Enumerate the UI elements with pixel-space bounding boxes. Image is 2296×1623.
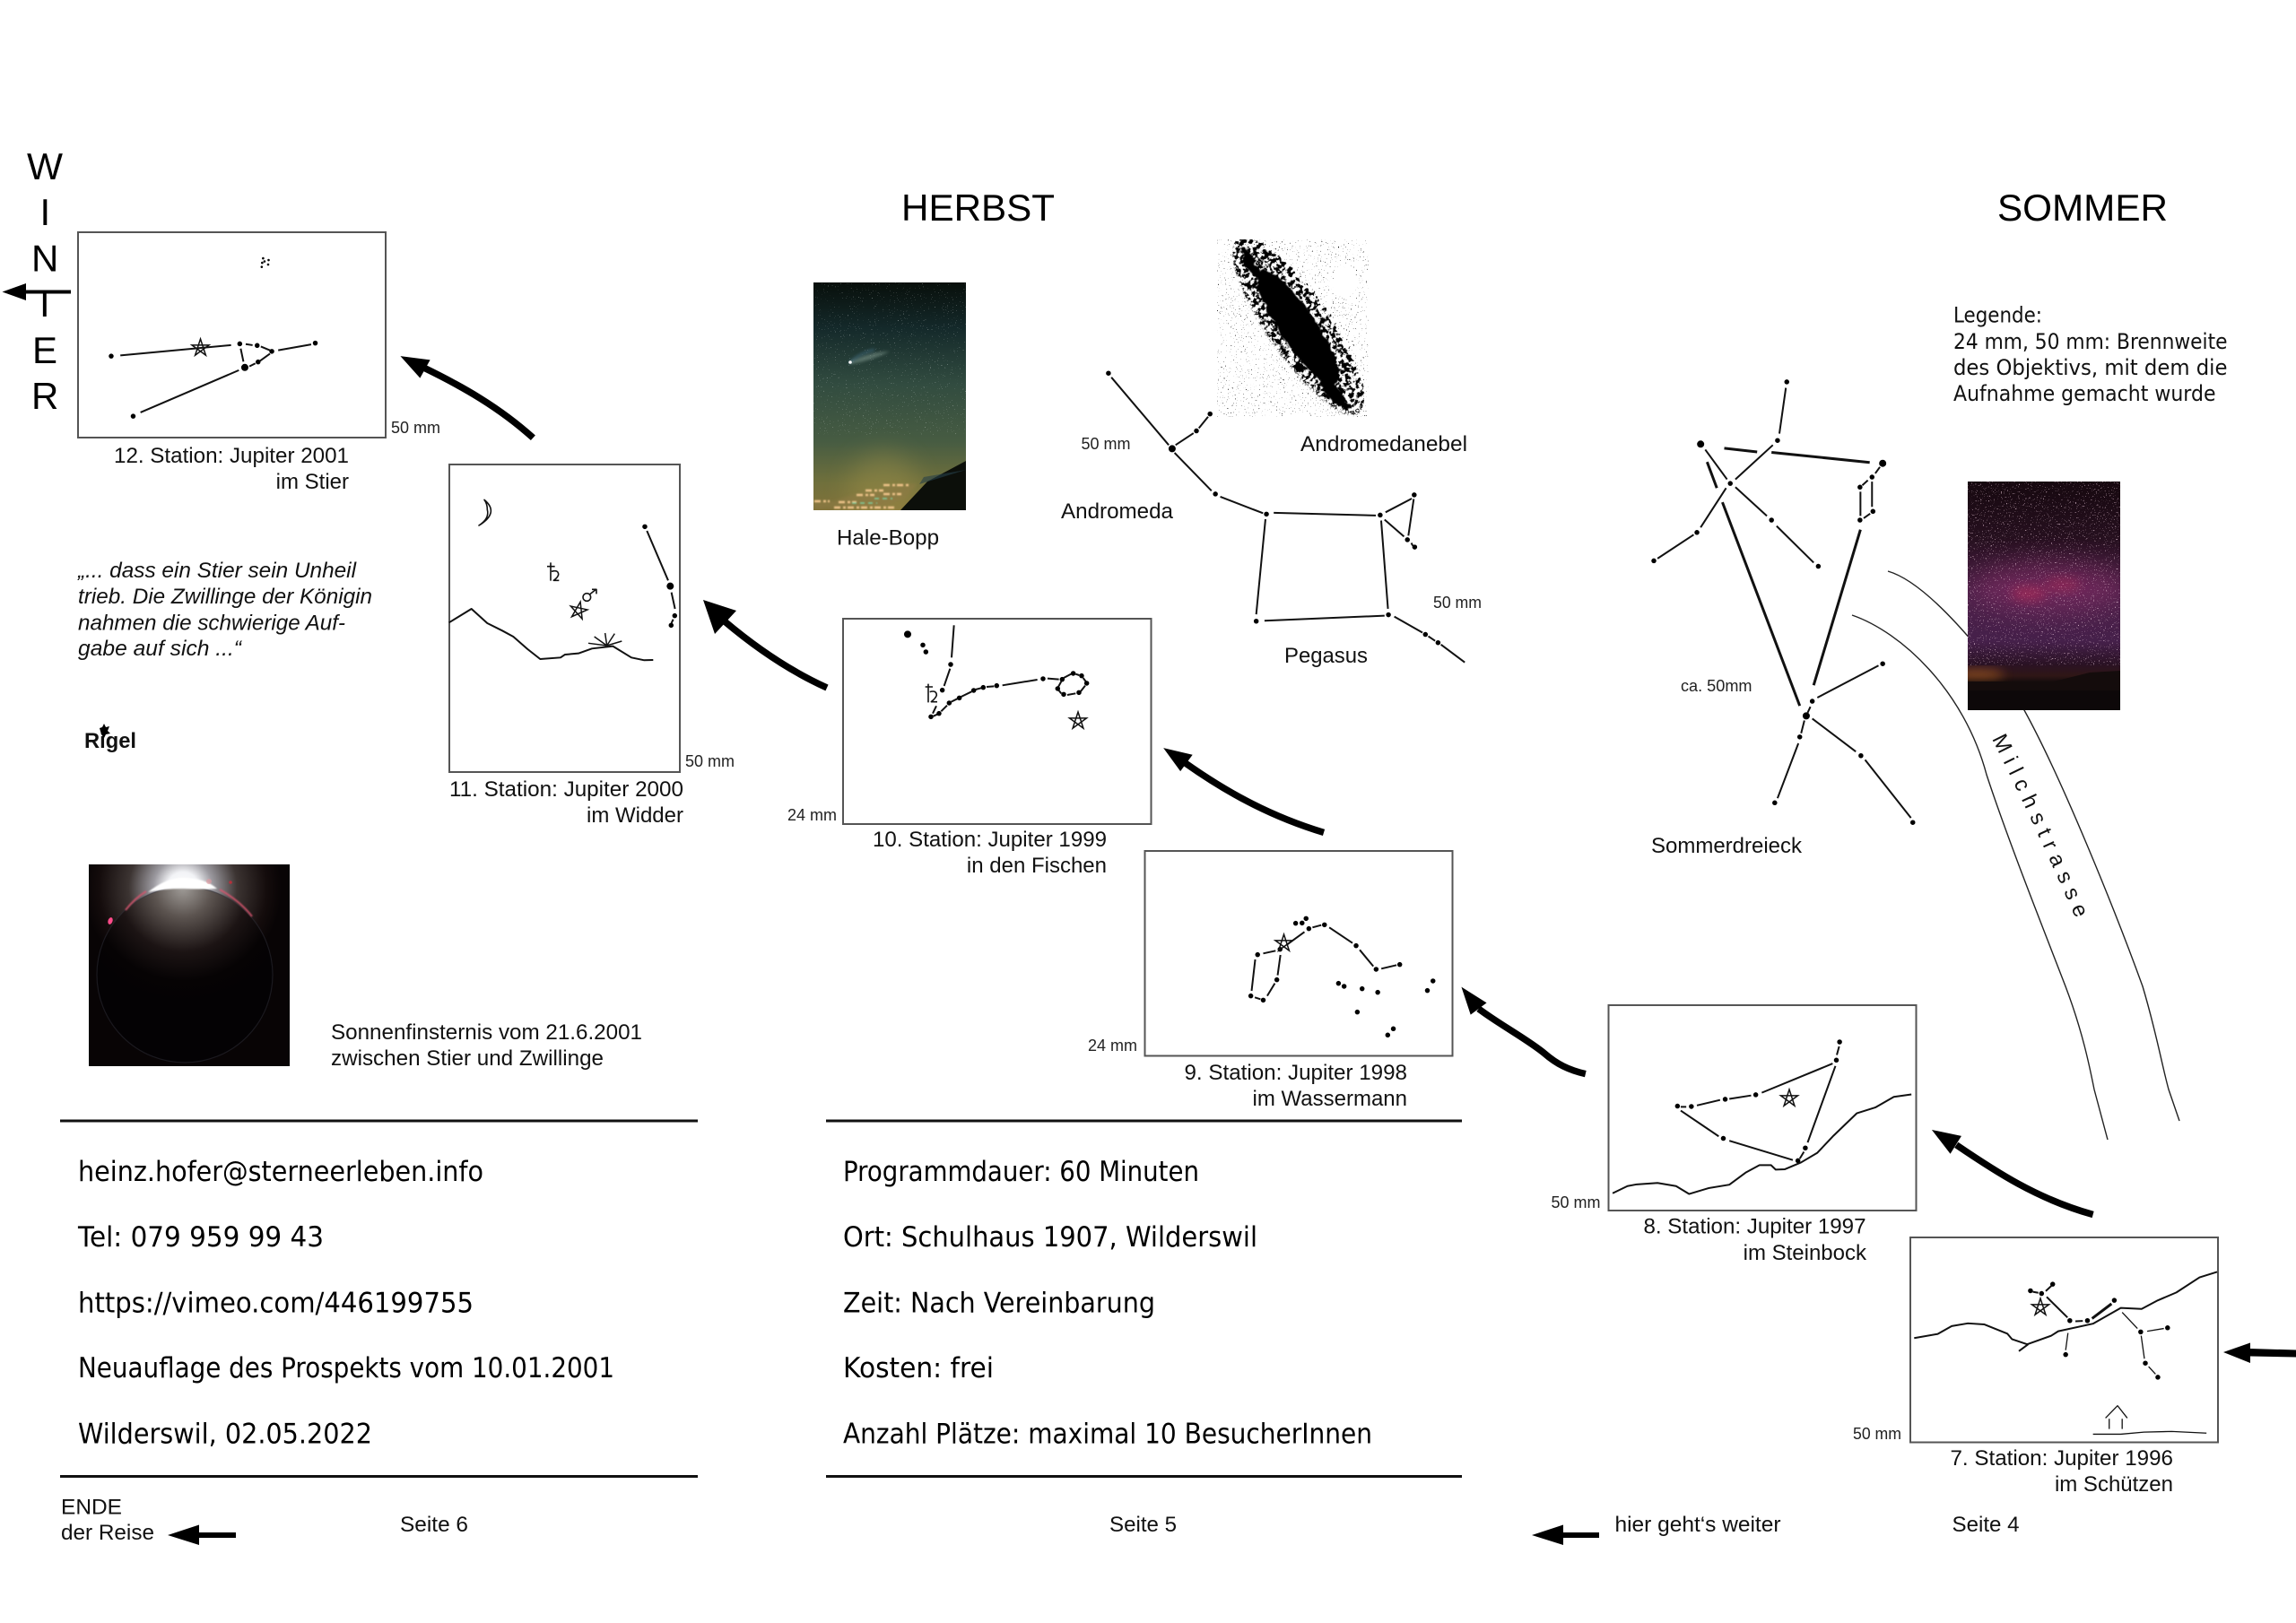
- heading: WINTER (vertical): I: [39, 191, 50, 233]
- photo: Andromeda nebula: [1217, 239, 1369, 417]
- page number 4: Seite 4: [1952, 1513, 2020, 1537]
- divider: left bottom: [60, 1475, 698, 1478]
- eclipse caption: [331, 1020, 642, 1071]
- focal length: Andromeda: 50 mm: [1082, 435, 1130, 453]
- caption: 8. Station: Jupiter 1997: [1643, 1214, 1866, 1239]
- caption: 12. Station: Jupiter 2001: [114, 444, 349, 468]
- legend: Legende:: [1953, 303, 2042, 328]
- caption: [873, 828, 1107, 878]
- panel: station 12: [78, 232, 440, 494]
- quote: „... dass ein Stier sein Unheil: [77, 559, 357, 583]
- heading: WINTER (vertical): T: [33, 282, 57, 325]
- icon: Jupiter star: [1069, 712, 1087, 728]
- label: Rigel: Rigel: [84, 729, 136, 753]
- page number 5: Seite 5: [1109, 1513, 1177, 1537]
- focal length: 50 mm: [685, 752, 735, 770]
- legend: des Objektivs, mit dem die: [1953, 355, 2228, 380]
- caption: [1950, 1446, 2173, 1497]
- panel: station 8: [1552, 1005, 1916, 1265]
- focal length: 50 mm: [1853, 1425, 1901, 1443]
- programme info block: Zeit: Nach Vereinbarung: [843, 1288, 1155, 1320]
- constellation: Steinbock: [1613, 1042, 1911, 1194]
- constellation: Andromeda and Pegasus: [1109, 373, 1465, 663]
- heading: WINTER (vertical): [27, 145, 63, 417]
- label: Hale-Bopp: Hale-Bopp: [837, 525, 939, 551]
- icon: Jupiter star: [192, 339, 209, 355]
- caption: im Steinbock: [1744, 1241, 1867, 1265]
- heading: WINTER (vertical): R: [31, 375, 58, 417]
- contact block: Wilderswil, 02.05.2022: [78, 1419, 372, 1451]
- programme info block: Programmdauer: 60 Minuten: [843, 1156, 1199, 1188]
- arrow: 8 to 9: [1461, 987, 1586, 1074]
- photo: Hale-Bopp comet: [813, 282, 966, 532]
- quote: gabe auf sich ...“: [78, 637, 243, 661]
- caption: 9. Station: Jupiter 1998: [1184, 1061, 1407, 1085]
- page number 6: Seite 6: [400, 1513, 468, 1537]
- constellation: Wassermann: [1251, 918, 1433, 1035]
- divider: left top: [60, 1119, 698, 1123]
- footer: end of journey: [61, 1496, 154, 1545]
- legend: Aufnahme gemacht wurde: [1953, 381, 2215, 406]
- caption: im Stier: [276, 470, 349, 494]
- caption: [114, 444, 349, 494]
- band: Milky Way: [1852, 571, 2179, 1140]
- frame: [1144, 851, 1453, 1056]
- arrow: 7 to 8: [1932, 1130, 2093, 1214]
- eclipse caption: zwischen Stier und Zwillinge: [331, 1046, 604, 1071]
- footer: end of journey: der Reise: [61, 1521, 154, 1545]
- photo: solar eclipse: [89, 864, 290, 1066]
- arrow: continue: [1532, 1524, 1599, 1545]
- focal length: 24 mm: [787, 806, 837, 824]
- frame: [1910, 1237, 2218, 1442]
- programme info block: [843, 1156, 1372, 1451]
- divider: middle top: [826, 1119, 1462, 1123]
- programme info block: Kosten: frei: [843, 1352, 994, 1384]
- quote: trieb. Die Zwillinge der Königin: [78, 585, 372, 609]
- frame: [843, 619, 1152, 824]
- photo: Milky Way: [1968, 482, 2120, 710]
- arrow: into station 7: [2223, 1343, 2296, 1363]
- arrow: end of journey: [168, 1524, 236, 1545]
- heading: HERBST: HERBST: [901, 187, 1055, 229]
- caption: [1643, 1214, 1867, 1265]
- focal length: 50 mm: [1552, 1193, 1600, 1211]
- caption: im Widder: [587, 803, 683, 828]
- caption: in den Fischen: [967, 854, 1107, 878]
- legend: 24 mm, 50 mm: Brennweite: [1953, 329, 2228, 354]
- focal length: 24 mm: [1088, 1037, 1137, 1055]
- frame: [449, 464, 680, 772]
- label: Andromedanebel: Andromedanebel: [1300, 432, 1467, 456]
- contact block: Neuauflage des Prospekts vom 10.01.2001: [78, 1352, 614, 1384]
- arrow: towards winter: [2, 283, 71, 300]
- legend: [1953, 303, 2228, 406]
- panel: station 10: [787, 619, 1152, 878]
- sketch: Schütze above horizon: [1914, 1271, 2217, 1434]
- heading: SOMMER: SOMMER: [1997, 187, 2168, 229]
- programme info block: Anzahl Plätze: maximal 10 BesucherInnen: [843, 1419, 1372, 1451]
- label: Milchstrasse: Milchstrasse: [1993, 733, 2084, 916]
- programme info block: Ort: Schulhaus 1907, Wilderswil: [843, 1221, 1257, 1254]
- icon: Jupiter star: [2032, 1298, 2048, 1315]
- contact block: https://vimeo.com/446199755: [78, 1288, 474, 1320]
- frame: [1609, 1005, 1916, 1211]
- contact block: heinz.hofer@sterneerleben.info: [78, 1156, 483, 1188]
- arrow: 9 to 10: [1163, 748, 1324, 832]
- footer: continue: hier geht‘s weiter: [1614, 1513, 1781, 1537]
- icon: Jupiter star: [1275, 934, 1292, 950]
- arrow: 11 to 12: [400, 356, 533, 438]
- caption: [1184, 1061, 1407, 1111]
- quote: [77, 559, 372, 661]
- quote: nahmen die schwierige Auf-: [78, 612, 345, 635]
- panel: station 7: [1853, 1237, 2218, 1497]
- arrow: 10 to 11: [703, 600, 827, 688]
- heading: WINTER (vertical): W: [27, 145, 63, 187]
- focal length: Sommerdreieck: ca. 50mm: [1681, 677, 1752, 695]
- divider: middle bottom: [826, 1475, 1462, 1478]
- label: Sommerdreieck: Sommerdreieck: [1651, 834, 1803, 858]
- caption: 10. Station: Jupiter 1999: [873, 828, 1107, 852]
- icon: Jupiter star: [1781, 1089, 1797, 1106]
- footer: end of journey: ENDE: [61, 1496, 122, 1519]
- constellation: Fische: [908, 625, 1087, 716]
- contact block: Tel: 079 959 99 43: [77, 1221, 324, 1254]
- caption: im Schützen: [2055, 1472, 2173, 1497]
- contact block: [77, 1156, 614, 1451]
- sky sketch: [449, 499, 675, 660]
- heading: WINTER (vertical): N: [31, 237, 58, 280]
- constellation: Stier: [111, 258, 316, 416]
- heading: WINTER (vertical): E: [32, 329, 57, 371]
- focal length: Pegasus: 50 mm: [1433, 594, 1482, 612]
- caption: [449, 777, 683, 828]
- focal length: 50 mm: [391, 419, 440, 437]
- constellation: Summer Triangle: [1654, 382, 1913, 822]
- icon: Jupiter star: [569, 600, 588, 620]
- label: Andromeda: Andromeda: [1061, 499, 1174, 524]
- label: Pegasus: Pegasus: [1284, 644, 1368, 668]
- frame: [78, 232, 386, 438]
- eclipse caption: Sonnenfinsternis vom 21.6.2001: [331, 1020, 642, 1045]
- panel: station 11: [449, 464, 735, 828]
- panel: station 9: [1088, 851, 1453, 1111]
- caption: im Wassermann: [1253, 1087, 1407, 1111]
- caption: 11. Station: Jupiter 2000: [449, 777, 683, 802]
- caption: 7. Station: Jupiter 1996: [1950, 1446, 2173, 1471]
